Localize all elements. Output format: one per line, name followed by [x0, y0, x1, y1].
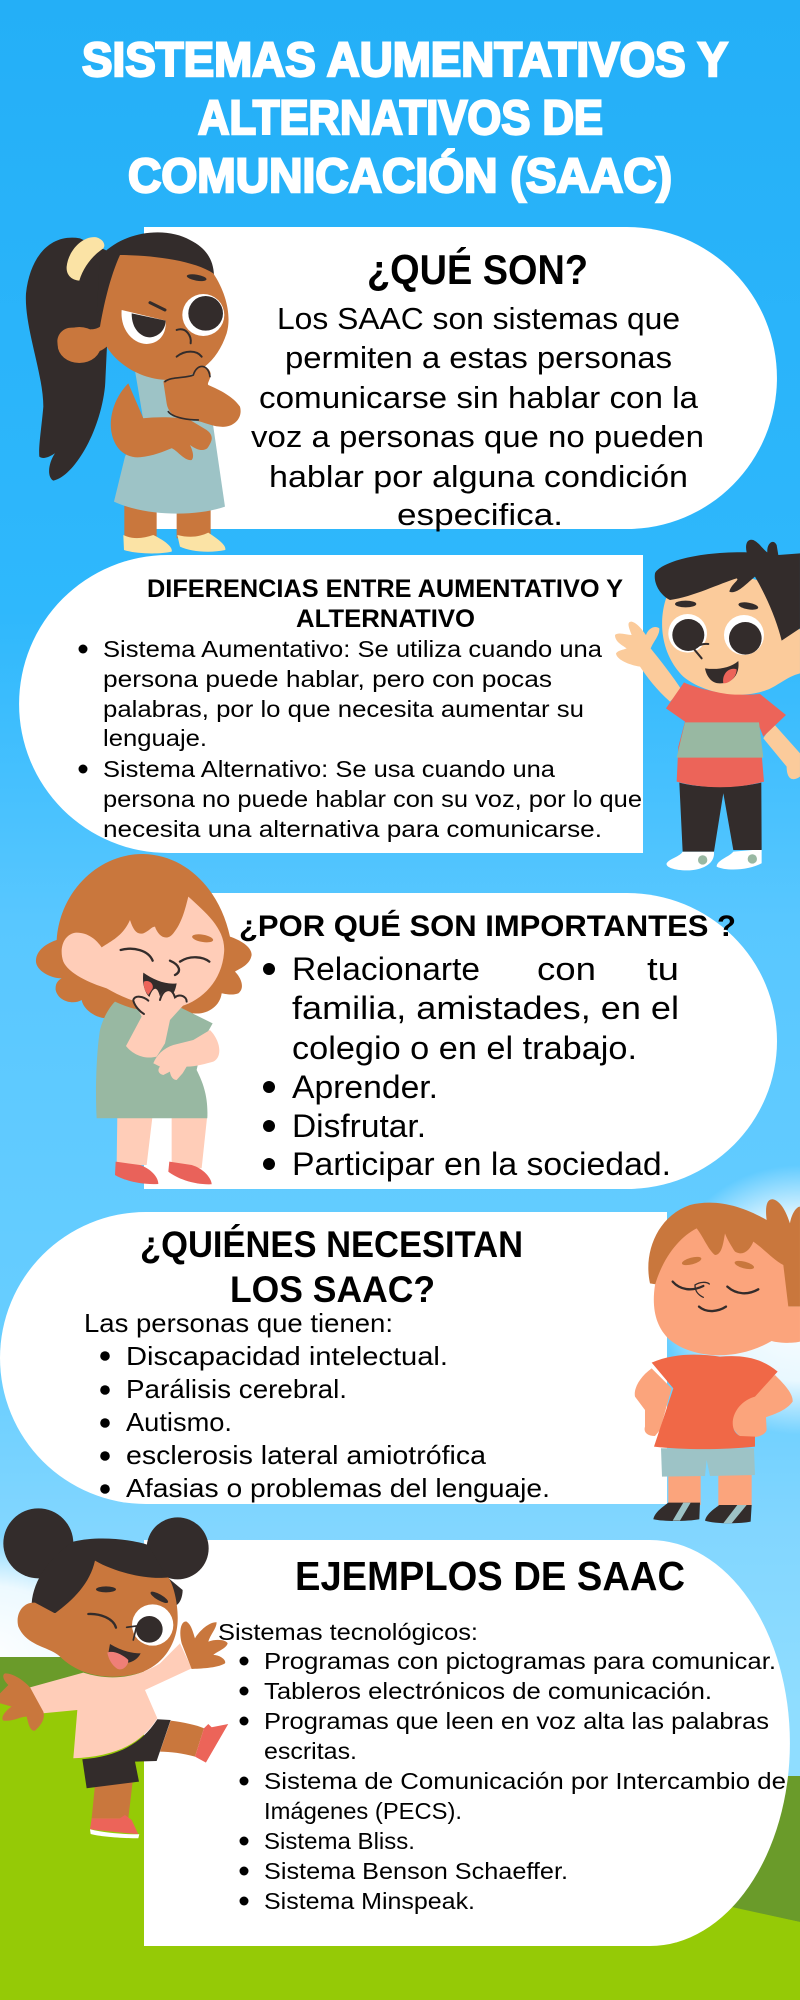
list: personas: Parálisis cerebral.: [126, 1374, 347, 1404]
list: personas: Afasias o problemas del lenguaje.: [126, 1473, 550, 1503]
list: sistemas tecnológicos: escritas.: [264, 1738, 357, 1764]
list: importancia: [263, 951, 679, 1182]
list: sistemas tecnológicos: Programas que leen en voz alta las palabras: [264, 1708, 769, 1734]
title: [82, 34, 728, 203]
list: sistemas tecnológicos: Sistemas tecnológicos:: [218, 1619, 478, 1645]
panel: quiénes necesitan: [0, 1212, 667, 1504]
heading: quiénes: ¿QUIÉNES NECESITAN: [140, 1224, 523, 1265]
icon: smiling boy: [635, 1199, 800, 1523]
title: SISTEMAS AUMENTATIVOS Y: [82, 34, 728, 87]
panel: ejemplos de saac: [144, 1540, 790, 1946]
list: sistemas tecnológicos: Sistema Benson Schaeffer.: [264, 1858, 568, 1884]
text block: definition: [251, 301, 704, 532]
list: sistemas tecnológicos: Imágenes (PECS).: [264, 1798, 462, 1824]
text block: definition: voz a personas que no pueden: [251, 419, 704, 454]
list: importancia: Participar en la sociedad.: [292, 1146, 671, 1182]
text block: definition: hablar por alguna condición: [269, 459, 688, 494]
list: aumentativo y alternativo: necesita una alternativa para comunicarse.: [103, 816, 602, 842]
list: sistemas tecnológicos: [218, 1619, 786, 1914]
icon: waving boy: [615, 540, 800, 870]
icon: winking girl: [0, 1508, 231, 1838]
panel: qué son: [144, 227, 777, 532]
heading: importantes: ¿POR QUÉ SON IMPORTANTES ?: [239, 909, 736, 943]
list: sistemas tecnológicos: Sistema Minspeak.: [264, 1888, 475, 1914]
list: personas: Las personas que tienen:: [84, 1308, 393, 1338]
list: sistemas tecnológicos: Sistema de Comunicación por Intercambio de: [264, 1768, 786, 1794]
list: personas: esclerosis lateral amiotrófica: [126, 1440, 487, 1470]
list: aumentativo y alternativo: lenguaje.: [103, 725, 207, 751]
list: importancia: colegio o en el trabajo.: [292, 1030, 637, 1066]
text block: definition: especifica.: [397, 497, 563, 532]
list: aumentativo y alternativo: [78, 636, 642, 842]
list: personas: Autismo.: [126, 1407, 232, 1437]
list: importancia: Disfrutar.: [292, 1108, 426, 1144]
panel: por qué son importantes: [144, 893, 777, 1189]
icon: laughing girl: [36, 854, 252, 1184]
heading: quiénes: [140, 1224, 523, 1310]
list: aumentativo y alternativo: Sistema Aumentativo: Se utiliza cuando una: [103, 636, 603, 662]
list: importancia: familia, amistades, en el: [292, 990, 679, 1026]
list: personas: Discapacidad intelectual.: [126, 1341, 448, 1371]
list: personas: [84, 1308, 550, 1503]
list: sistemas tecnológicos: Tableros electrónicos de comunicación.: [264, 1678, 712, 1704]
heading: ejemplos: EJEMPLOS DE SAAC: [295, 1553, 685, 1599]
list: importancia: Aprender.: [292, 1069, 438, 1105]
panel: diferencias: [19, 555, 643, 853]
list: sistemas tecnológicos: Programas con pictogramas para comunicar.: [264, 1648, 776, 1674]
heading: quiénes: LOS SAAC?: [230, 1269, 435, 1310]
heading: diferencias: [147, 575, 623, 633]
list: importancia: con: [537, 951, 596, 987]
list: aumentativo y alternativo: persona no puede hablar con su voz, por lo que: [103, 786, 642, 812]
title: ALTERNATIVOS DE: [198, 92, 603, 145]
list: aumentativo y alternativo: Sistema Alternativo: Se usa cuando una: [103, 756, 556, 782]
list: aumentativo y alternativo: palabras, por lo que necesita aumentar su: [103, 696, 584, 722]
list: importancia: tu: [647, 951, 679, 987]
text block: definition: comunicarse sin hablar con la: [259, 380, 699, 415]
heading: qué son: ¿QUÉ SON?: [367, 246, 588, 293]
text block: definition: permiten a estas personas: [285, 340, 672, 375]
icon: thinking girl: [26, 232, 241, 553]
heading: diferencias: ALTERNATIVO: [296, 605, 475, 633]
list: importancia: Relacionarte: [292, 951, 480, 987]
title: COMUNICACIÓN (SAAC): [128, 148, 672, 203]
list: aumentativo y alternativo: persona puede hablar, pero con pocas: [103, 666, 552, 692]
list: sistemas tecnológicos: Sistema Bliss.: [264, 1828, 415, 1854]
heading: diferencias: DIFERENCIAS ENTRE AUMENTATIVO Y: [147, 575, 623, 603]
text block: definition: Los SAAC son sistemas que: [277, 301, 680, 336]
